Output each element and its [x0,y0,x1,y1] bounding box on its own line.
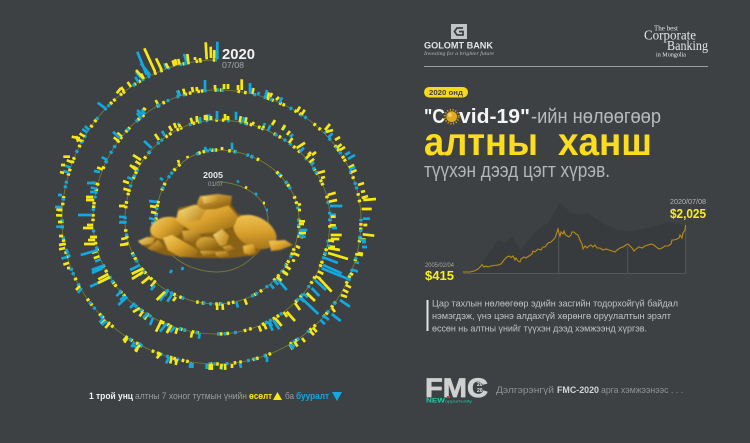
text: more details link line: арга хэмжээнээс . . . [601,385,683,396]
logo: The best Corporate Banking: The best [654,24,678,32]
small yellow ticks [62,60,361,364]
text: more details link line: FMC-2020 [557,385,599,396]
logo: FMC 2020: opportunity [445,400,472,404]
label: spiral start 2005: 01/07 [208,182,224,188]
label: spiral end 2020: 2020 [222,46,255,63]
long blue bars [55,42,370,369]
heading: алтны ханш: ханш [558,121,652,164]
gold price line [463,225,686,272]
logo: Golomt Bank: Investing for a brighter future [423,50,495,57]
small blue ticks [62,60,361,364]
text block: explanation [426,298,678,334]
logo: Golomt Bank: GOLOMT BANK [424,40,493,52]
label: spiral start 2005 [203,171,224,188]
medium blue ticks [59,57,364,367]
start label: 2005/02/04 [425,263,455,269]
text: more details link line: Дэлгэрэнгүй [496,385,554,396]
end label [670,197,706,221]
text block: explanation: нэмэгдэж, үнэ цэнэ алдахгүй хөрөнгө оруулалтын эрэлт [432,311,672,321]
logo: FMC 2020: 20 [477,388,483,394]
logo: The best Corporate Banking [644,24,708,58]
heading line 1: vid-19" [459,106,530,128]
logo: Golomt Bank [423,24,495,57]
medium yellow ticks [59,57,364,367]
start label: $415 [425,268,454,283]
heading line 3: түүхэн дээд цэгт хүрэв. [424,160,610,182]
label: spiral end 2020: 07/08 [222,61,245,70]
legend: ба [285,391,294,401]
legend: өсөлт [249,391,273,401]
legend: бууралт [296,391,330,401]
badge: 2020 онд: 2020 онд [429,88,463,97]
heading line 1: -ийн нөлөөгөөр [531,106,661,128]
legend [89,391,342,401]
heading: алтны ханш [424,121,652,164]
long yellow bars [58,42,376,370]
heading: алтны ханш: алтны [424,121,538,164]
line chart: gold price 2005-2020 [425,197,706,283]
legend: 1 трой унц [89,391,133,401]
logo: FMC 2020: FMC [425,373,488,403]
icon: coronavirus as letter o [445,110,459,124]
icon: gold nugget pile [138,194,293,258]
shadow area chart [470,202,685,273]
end label: 2020/07/08 [670,197,706,206]
legend: алтны 7 хоног тутмын үнийн [135,391,247,401]
logo: FMC 2020: 20 [477,382,483,388]
icon: up triangle [273,392,282,400]
end label: $2,025 [670,206,706,221]
logo: The best Corporate Banking: in Mongolia [656,52,686,58]
spiral bar chart: weekly gold price changes [55,42,376,370]
icon: down triangle [332,392,342,401]
badge: 2020 онд [424,87,468,98]
logo: The best Corporate Banking: Corporate [644,28,696,42]
heading line 1 [424,106,661,128]
text: more details link line [496,385,683,396]
label: spiral start 2005: 2005 [203,171,224,180]
logo: The best Corporate Banking: Banking [667,38,708,53]
heading line 1: "C [424,106,445,128]
text block: explanation: Цар тахлын нөлөөгөөр эдийн засгийн тодорхойгүй байдал [432,298,678,308]
logo: FMC 2020: NEW [426,398,446,404]
spiral baseline [62,60,361,364]
text block: explanation: өссөн нь алтны үнийг түүхэн дээд хэмжээнд хүргэв. [432,324,647,334]
icon: Golomt square mark [451,24,467,39]
